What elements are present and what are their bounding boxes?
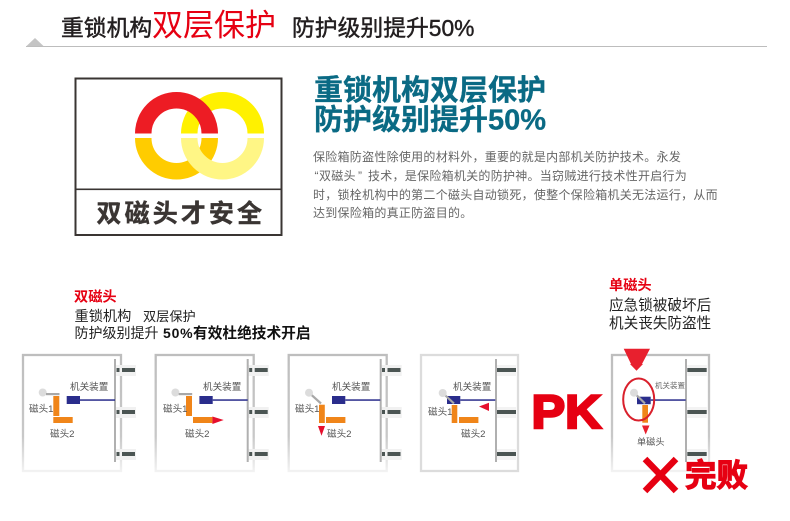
caption heading: 单磁头 xyxy=(609,277,652,294)
panel: single magnet safe: 单磁头 xyxy=(637,436,665,447)
safe frame xyxy=(156,355,254,471)
arrow: attack from above xyxy=(624,349,650,371)
teal heading xyxy=(314,74,546,136)
mechanism xyxy=(67,396,115,404)
bolts xyxy=(249,365,269,460)
labels: 磁头1 xyxy=(428,406,453,418)
safe frame xyxy=(612,355,709,471)
arrow: mechanism blocked xyxy=(479,403,489,411)
panel: step 4 xyxy=(421,355,518,471)
arrow: magnet 1 drops xyxy=(318,426,325,436)
header title: red part: 双层保护 xyxy=(152,8,276,43)
bolts xyxy=(687,365,707,460)
door edge xyxy=(114,359,116,462)
labels: 机关装置 xyxy=(655,380,685,390)
magnet 1 xyxy=(53,396,59,416)
labels: 机关装置 xyxy=(70,381,109,393)
description text: 保险箱防盗性除使用的材料外，重要的就是内部机关防护技术。永发 xyxy=(313,149,681,164)
caption line one: 应急锁被破坏后 xyxy=(609,296,711,314)
teal heading: 防护级别提升50% xyxy=(314,104,546,136)
caption line one: 重锁机构 xyxy=(74,309,131,325)
door edge xyxy=(685,359,687,462)
teal heading: 重锁机构双层保护 xyxy=(314,74,546,107)
panel: single magnet safe xyxy=(612,349,709,471)
caption line two: 防护级别提升 xyxy=(74,325,158,341)
mechanism xyxy=(447,396,495,404)
caption line one: 双层保护 xyxy=(143,309,196,324)
safe frame xyxy=(289,355,387,471)
magnet 2 xyxy=(193,417,212,423)
lever xyxy=(439,389,454,404)
icon: interlocked rings xyxy=(143,100,256,171)
caption heading: 双磁头 xyxy=(74,288,117,306)
magnet 2 xyxy=(53,417,73,423)
double head caption xyxy=(74,288,311,342)
bolts xyxy=(497,365,516,460)
caption line two: 机关丧失防盗性 xyxy=(609,315,711,332)
bolts xyxy=(116,365,136,460)
magnet 1 xyxy=(319,405,325,423)
safe frame xyxy=(421,355,518,471)
description text: ” xyxy=(358,169,362,183)
description text: 时，锁栓机构中的第二个磁头自动锁死，使整个保险箱机关无法运行，从而 xyxy=(313,187,718,202)
lever xyxy=(630,389,645,404)
header title: black part: 重锁机构 xyxy=(61,15,152,41)
single head caption xyxy=(609,277,711,332)
mechanism xyxy=(637,397,686,404)
description text: 双磁头 xyxy=(319,168,356,183)
labels: 机关装置 xyxy=(203,381,242,393)
arrow: magnet drops xyxy=(642,426,650,434)
highlight ellipse xyxy=(623,378,654,420)
labels: 磁头2 xyxy=(461,428,486,440)
safe frame xyxy=(23,355,121,471)
result: defeat xyxy=(645,457,748,493)
bolts xyxy=(382,365,402,460)
lever xyxy=(171,388,192,396)
labels: 磁头1 xyxy=(163,403,188,415)
magnet 1 xyxy=(186,396,192,416)
labels: 磁头2 xyxy=(50,428,75,440)
magnet 2 xyxy=(326,417,345,423)
labels xyxy=(29,381,109,440)
labels: 磁头1 xyxy=(29,403,54,415)
mechanism xyxy=(332,396,380,404)
lever xyxy=(305,389,321,404)
panel: step 3 xyxy=(289,355,402,471)
defeat label: 完败 xyxy=(685,457,748,493)
logo divider xyxy=(76,188,281,190)
arrow: magnet 2 moves right xyxy=(212,416,224,424)
labels xyxy=(295,381,371,440)
caption line two: 有效杜绝技术开启 xyxy=(193,324,311,342)
single magnet xyxy=(642,405,648,423)
magnet 1 xyxy=(452,405,457,423)
header xyxy=(26,8,767,47)
labels: 机关装置 xyxy=(332,381,371,393)
description text xyxy=(313,149,718,220)
labels xyxy=(163,381,242,440)
mechanism xyxy=(199,396,248,404)
logo frame xyxy=(76,78,282,235)
PK label: PK xyxy=(532,385,602,438)
magnet 2 xyxy=(459,417,478,423)
labels: 磁头2 xyxy=(327,428,352,440)
header subtitle: 防护级别提升50% xyxy=(292,15,474,41)
labels: 机关装置 xyxy=(453,381,492,393)
header rule xyxy=(26,46,767,47)
caption line two: 50% xyxy=(163,325,193,341)
icon: red cross xyxy=(645,459,676,491)
door edge xyxy=(495,359,497,462)
door edge xyxy=(380,359,382,462)
labels xyxy=(428,381,492,440)
description text: “ xyxy=(314,169,319,183)
header triangle marker xyxy=(26,38,44,46)
lever xyxy=(39,388,60,396)
labels: 磁头1 xyxy=(295,403,320,415)
logo panel: double magnetic head xyxy=(76,78,282,235)
description text: 达到保险箱的真正防盗目的。 xyxy=(313,205,473,220)
panel: step 1 xyxy=(23,355,136,471)
labels: 磁头2 xyxy=(185,428,210,440)
description text: 技术，是保险箱机关的防护神。当窃贼进行技术性开启行为 xyxy=(368,168,687,183)
logo caption: 双磁头才安全 xyxy=(96,200,265,228)
door edge xyxy=(247,359,249,462)
panel: step 2 xyxy=(156,355,269,471)
